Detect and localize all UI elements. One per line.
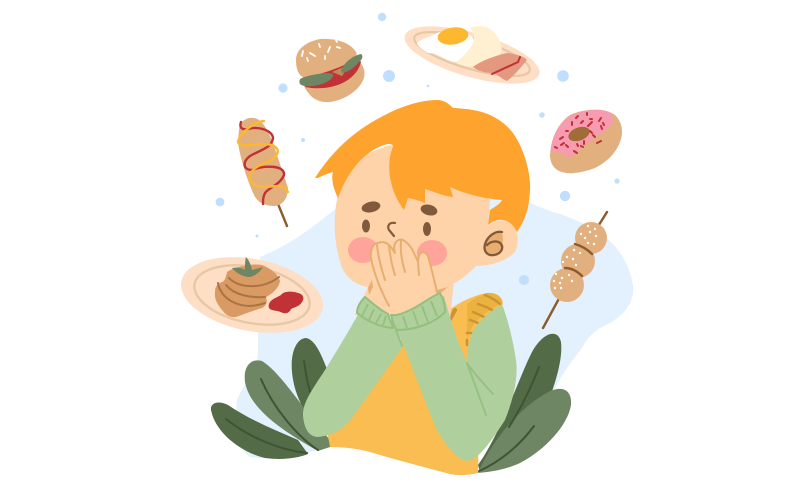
plate <box>174 246 330 344</box>
cream <box>456 26 502 66</box>
torso: yellow vest <box>325 293 503 475</box>
vest knit collar <box>467 293 502 340</box>
food: steak plate <box>174 246 330 344</box>
neck <box>355 280 454 320</box>
right leaves <box>478 334 571 473</box>
nose <box>388 223 395 236</box>
eyes <box>362 220 370 232</box>
bacon <box>473 53 527 81</box>
garnish <box>232 257 263 277</box>
sleeve fold lines <box>396 330 493 415</box>
face and head skin <box>335 145 518 300</box>
food: egg and bacon plate <box>399 15 545 95</box>
yolk <box>436 25 470 47</box>
sleeve cuffs <box>357 293 445 330</box>
hand <box>368 240 448 311</box>
food: corn dog <box>238 118 288 226</box>
child figure <box>303 100 530 475</box>
food: meatball skewer <box>543 212 607 328</box>
meat slices <box>215 265 280 317</box>
food: burger <box>296 39 365 102</box>
left sleeve <box>303 298 402 437</box>
background blob <box>236 198 633 458</box>
left leaves <box>211 338 345 459</box>
scattered dots <box>216 13 620 285</box>
right sleeve <box>392 296 517 461</box>
ear inner <box>485 232 503 255</box>
ketchup <box>269 292 303 313</box>
egg white <box>417 30 474 62</box>
cheeks <box>348 237 378 263</box>
food: donut <box>550 110 622 173</box>
hair <box>315 100 530 232</box>
eyebrows <box>361 200 381 214</box>
